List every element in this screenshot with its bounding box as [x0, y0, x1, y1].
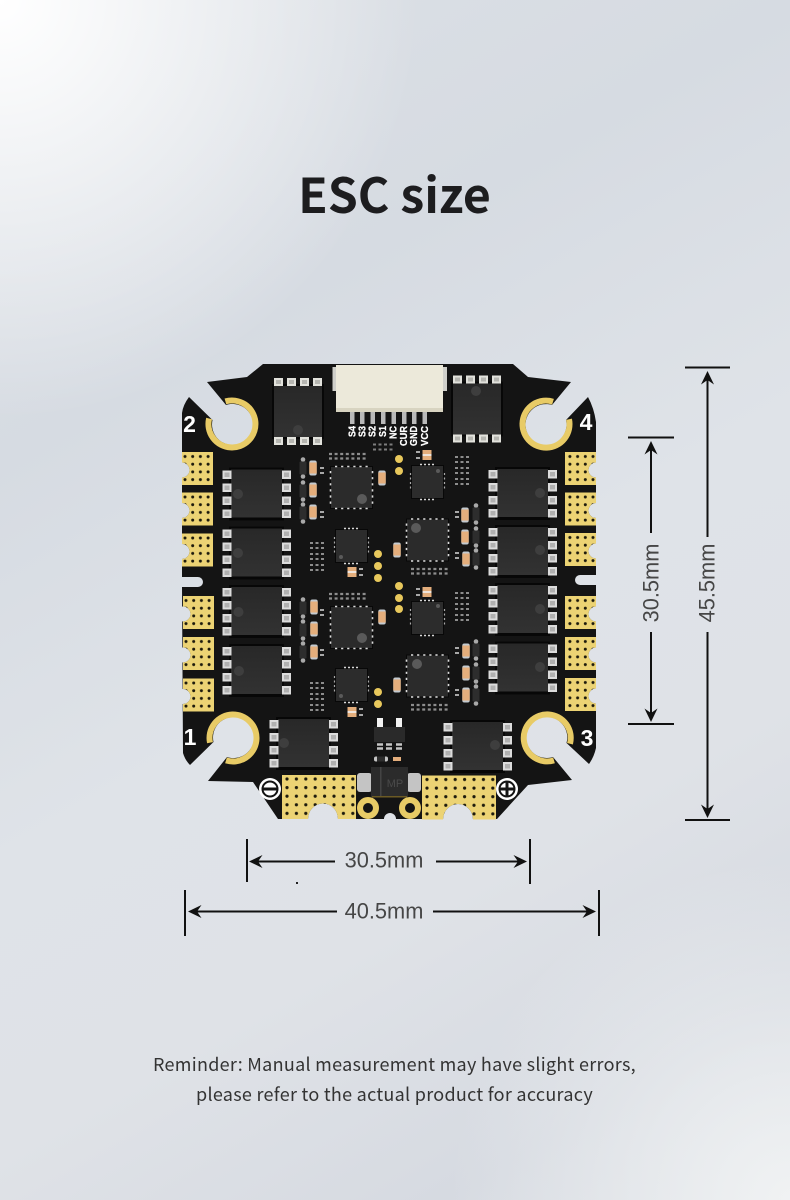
motor number labels: 3: [581, 725, 593, 751]
diodes: [300, 457, 480, 706]
connector pin labels: S1: [377, 426, 389, 437]
connector pin labels: VCC: [419, 426, 431, 446]
ESC circuit board: [182, 364, 596, 820]
dimension: 30.5mm width: [247, 839, 530, 884]
power diode: [357, 767, 421, 798]
motor number labels: 2: [183, 411, 196, 437]
driver chips: [330, 464, 449, 702]
capacitors: [309, 460, 470, 702]
motor number labels: 4: [580, 409, 593, 435]
title: ESC size: [298, 157, 491, 227]
power pads rings: [360, 800, 418, 816]
top MOSFETs: [272, 376, 503, 445]
connector: [332, 365, 447, 424]
mounting ring 2: [208, 400, 255, 447]
dimension: 40.5mm width: [185, 890, 599, 936]
reminder text: [153, 1051, 636, 1107]
mounting ring 4: [523, 401, 570, 448]
battery pads: [282, 775, 496, 820]
connector pin labels: NC: [388, 426, 400, 439]
right MOSFET column: [488, 467, 557, 694]
connector pin labels: [346, 426, 431, 446]
left MOSFET column: [222, 468, 291, 697]
reminder text: Reminder: Manual measurement may have slight errors,: [153, 1051, 636, 1077]
connector pin labels: S3: [356, 426, 368, 437]
reminder text: please refer to the actual product for accuracy: [196, 1081, 593, 1107]
right motor pads: [565, 452, 596, 711]
mounting ring 1: [210, 714, 257, 761]
motor number labels: [183, 409, 593, 751]
bottom MOSFETs: [270, 717, 512, 773]
dimension: 30.5mm height: 30.5mm: [638, 544, 664, 622]
left motor pads: [182, 452, 214, 712]
connector pin labels: S2: [366, 426, 378, 437]
small component pads: [310, 444, 469, 717]
dimension: 30.5mm height: [628, 438, 674, 724]
connector pin labels: GND: [408, 426, 420, 446]
dimension: 40.5mm width: 40.5mm: [345, 898, 423, 924]
dimension: 30.5mm width: 30.5mm: [345, 848, 423, 872]
board outline: [182, 364, 596, 819]
motor number labels: 1: [184, 724, 197, 750]
power diode: MP: [387, 778, 403, 790]
connector pin labels: CUR: [398, 426, 410, 446]
connector pin labels: S4: [346, 426, 358, 437]
mounting ring 3: [524, 714, 571, 761]
regulator chip: [374, 718, 405, 762]
dimension: 45.5mm height: 45.5mm: [694, 544, 720, 622]
icon: negative terminal: [259, 778, 281, 800]
gold vias: [374, 455, 403, 708]
icon: positive terminal: [496, 778, 518, 800]
dimension: 45.5mm height: [685, 368, 730, 820]
